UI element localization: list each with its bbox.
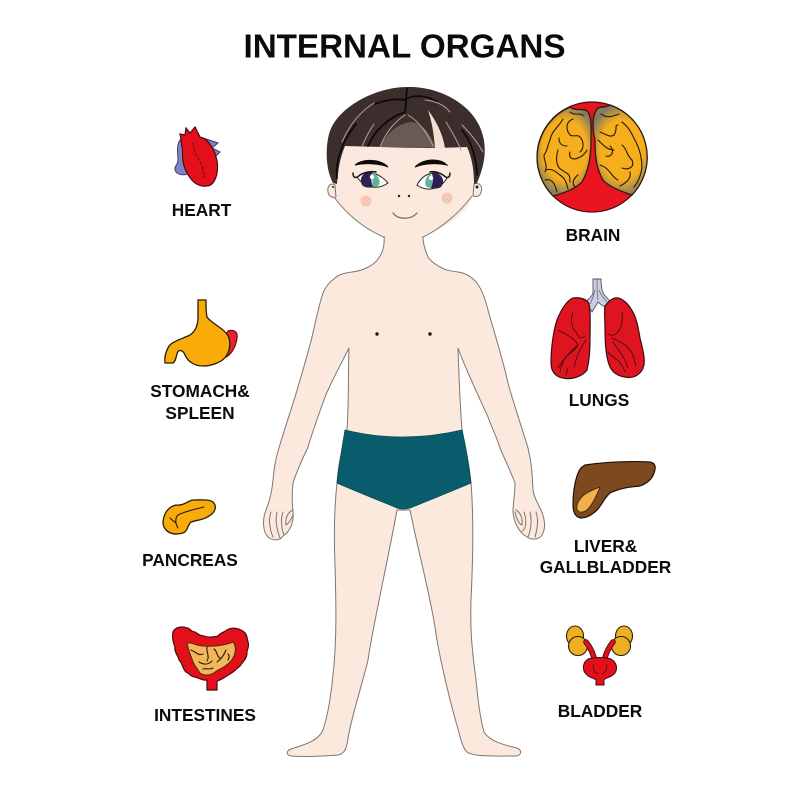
icon: pancreas <box>163 500 215 534</box>
label: stomach and spleen: STOMACH& <box>150 381 250 401</box>
label: lungs: LUNGS <box>569 390 629 410</box>
icon: heart <box>175 127 220 186</box>
label: liver and gallbladder: GALLBLADDER <box>540 557 672 577</box>
label: bladder: BLADDER <box>558 701 643 721</box>
cheeks <box>360 192 452 206</box>
finger lines <box>270 510 538 538</box>
fringe shading <box>380 122 435 147</box>
eyebrows <box>355 160 447 167</box>
hair <box>327 87 485 184</box>
icon: lungs <box>551 279 644 379</box>
label: heart: HEART <box>172 200 232 220</box>
label: pancreas: PANCREAS <box>142 550 238 570</box>
title: INTERNAL ORGANS <box>243 28 566 66</box>
fringe highlight <box>428 110 445 148</box>
label: brain: BRAIN <box>566 225 620 245</box>
nipples <box>375 332 432 336</box>
body outline <box>264 237 544 756</box>
label: stomach and spleen <box>150 381 250 423</box>
smile <box>393 213 417 218</box>
label: stomach and spleen: SPLEEN <box>165 403 235 423</box>
label: liver and gallbladder: LIVER& <box>574 536 637 556</box>
head and face <box>332 140 476 243</box>
label: intestines: INTESTINES <box>154 705 256 725</box>
ears <box>328 184 336 197</box>
icon: stomach and spleen <box>165 300 237 366</box>
figure: child body <box>264 87 544 756</box>
nose <box>398 195 410 197</box>
underwear <box>337 430 471 509</box>
label: liver and gallbladder <box>540 536 672 577</box>
icon: brain <box>537 102 647 212</box>
icon: intestines <box>173 627 249 690</box>
icon: liver and gallbladder <box>573 462 655 518</box>
icon: bladder and kidneys <box>566 626 632 685</box>
eyes <box>353 172 450 189</box>
